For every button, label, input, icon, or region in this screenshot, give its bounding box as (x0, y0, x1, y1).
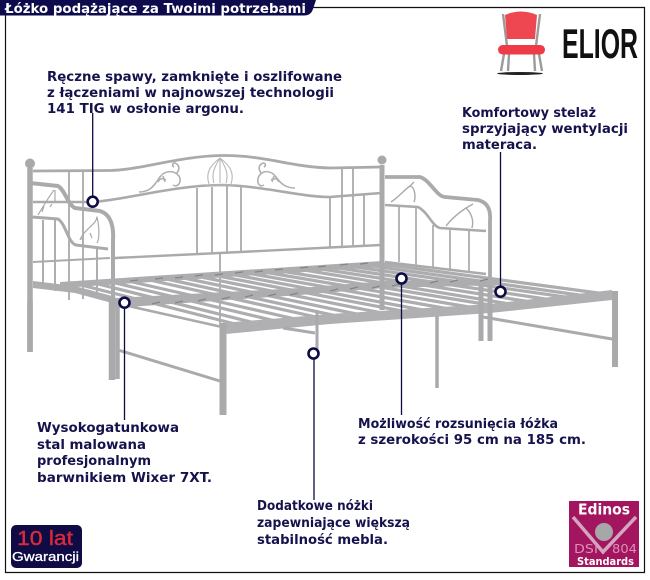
text: welds: z łączeniami w najnowszej technologii (47, 85, 334, 101)
beam brackets (130, 263, 488, 304)
ornament: left scroll (139, 163, 180, 192)
text: steel: Wysokogatunkowa (37, 420, 179, 436)
text: legs: stabilność mebla. (257, 532, 388, 548)
badge: Edinos standards: 804 (612, 542, 637, 556)
right side frame (385, 177, 490, 285)
text: ventilation (462, 105, 628, 153)
leader: steel (120, 298, 130, 420)
text: ventilation: sprzyjający wentylacji (462, 121, 628, 137)
title banner: Łóżko podążające za Twoimi potrzebami (4, 1, 306, 17)
text: legs: zapewniające większą (257, 515, 410, 531)
icon: red chair (497, 12, 545, 75)
text: ventilation: Komfortowy stelaż (462, 105, 596, 121)
badge: Edinos standards: DSI (574, 542, 598, 556)
left end rails (33, 281, 112, 303)
badge: 10 years warranty: 10 lat (17, 528, 73, 550)
text: steel: barwnikiem Wixer 7XT. (37, 470, 212, 486)
left side frame (25, 158, 113, 352)
front rail (222, 290, 612, 334)
leader: legs (308, 348, 318, 500)
badge: Edinos standards (569, 500, 639, 568)
headboard back panel (33, 155, 381, 325)
slatted platform (33, 261, 613, 334)
text: extension: z szerokości 95 cm na 185 cm. (358, 432, 586, 448)
badge: 10 years warranty: Gwarancji (12, 549, 79, 564)
text: steel (37, 420, 212, 486)
text: extension (358, 416, 586, 448)
text: legs (257, 498, 410, 548)
ornament: right scroll (258, 163, 295, 188)
text: welds (47, 69, 342, 117)
text: steel: stal malowana (37, 437, 146, 453)
badge: Edinos standards: Standards (577, 556, 634, 568)
badge: 10 years warranty (11, 525, 82, 568)
bed illustration (25, 155, 615, 415)
ornament: shell (206, 158, 234, 185)
text: welds: 141 TIG w osłonie argonu. (47, 101, 244, 117)
text: extension: Możliwość rozsunięcia łóżka (358, 416, 558, 432)
slats (77, 264, 613, 326)
text: ventilation: materaca. (462, 137, 537, 153)
leader: welds (88, 113, 98, 207)
leader: ventilation (496, 152, 506, 297)
legs and cross braces (30, 156, 615, 415)
middle beam (115, 279, 500, 308)
logo: Elior (497, 12, 638, 75)
leader: extension (396, 274, 406, 415)
badge: Edinos standards: Edinos (578, 500, 630, 518)
text: legs: Dodatkowe nóżki (257, 498, 373, 514)
text: steel: profesjonalnym (37, 453, 151, 469)
rear beam (60, 261, 382, 288)
text: welds: Ręczne spawy, zamknięte i oszlifowane (47, 69, 342, 85)
